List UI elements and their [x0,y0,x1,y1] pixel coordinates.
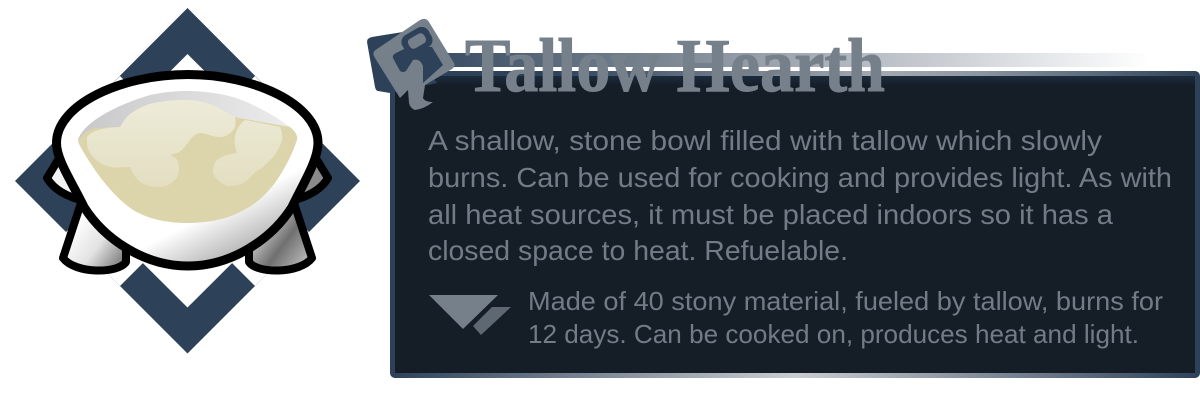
back left leg [47,160,84,201]
text block: stats: 12 days. Can be cooked on, produces heat and light. [528,319,1139,349]
bowl body [56,74,318,266]
panel: header band [395,53,1150,67]
front left leg [63,200,126,271]
tallow highlights [87,100,282,187]
icon: info badge [367,19,455,110]
text block: description: burns. Can be used for cooking and provides light. As with [428,162,1172,193]
bowl inner rim shadow [78,91,290,160]
tallow surface [78,100,297,223]
text block: description [428,125,1172,266]
title: Tallow Hearth [465,24,885,108]
icon: diamond frame [15,8,360,354]
panel: description box [390,71,1200,378]
text block: description: closed space to heat. Refuelable. [428,235,848,266]
icon: tallow hearth bowl [47,74,328,271]
text block: stats [528,286,1163,349]
icon: stats marker [429,295,511,335]
front right leg [249,200,312,271]
text block: description: A shallow, stone bowl filled with tallow which slowly [428,125,1102,156]
back right leg [291,160,328,201]
text block: description: all heat sources, it must be placed indoors so it has a [428,199,1113,230]
text block: stats: Made of 40 stony material, fueled by tallow, burns for [528,286,1163,316]
